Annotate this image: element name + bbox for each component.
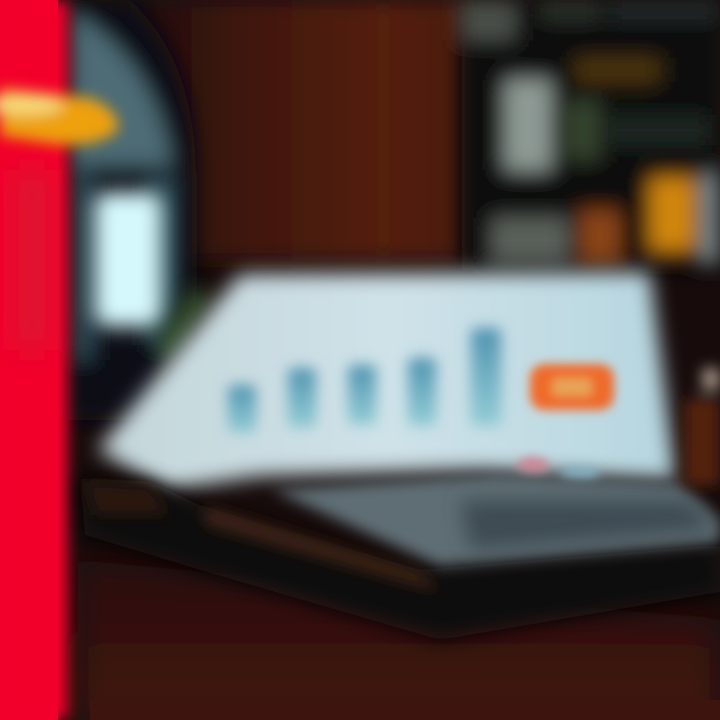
bookshelf <box>460 0 720 270</box>
red banner shade <box>18 170 46 350</box>
window bright pane <box>94 192 162 327</box>
left book edge <box>85 482 170 515</box>
bar chart <box>228 328 501 433</box>
table surface <box>78 560 720 720</box>
window arch <box>68 0 195 420</box>
wooden wall <box>130 0 465 260</box>
paper sheet with chart <box>98 272 676 490</box>
coffee cup <box>684 368 720 486</box>
keyboard <box>272 474 720 566</box>
table base to bottom edge <box>90 700 720 720</box>
brown laptop edge <box>205 505 440 592</box>
small pink and blue marks <box>517 457 600 481</box>
yellow orange tab <box>0 88 118 145</box>
red vertical banner <box>0 0 68 720</box>
red banner base <box>0 0 58 720</box>
plant accent <box>155 285 212 365</box>
laptop dark body <box>80 478 720 640</box>
laptop <box>80 474 720 640</box>
orange callout label <box>530 364 614 410</box>
paper <box>98 272 676 490</box>
keyboard shading <box>460 500 715 550</box>
